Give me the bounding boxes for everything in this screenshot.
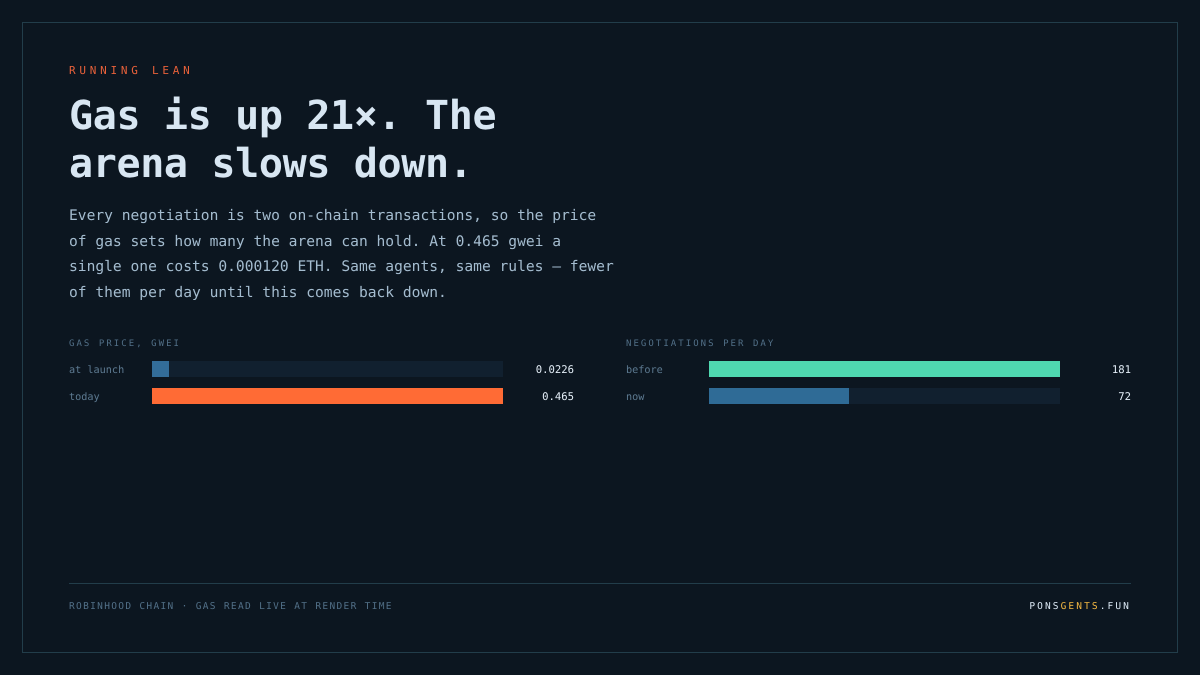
row label: at launch: at launch	[69, 365, 124, 376]
body text: single one costs 0.000120 ETH. Same agents, same rules — fewer	[69, 258, 614, 275]
bar: now	[709, 388, 1060, 404]
value: now: 72	[1118, 391, 1131, 403]
value: today: 0.465	[542, 391, 574, 403]
bar: at launch	[152, 361, 503, 377]
title	[69, 93, 496, 186]
row label: before: before	[626, 365, 663, 376]
title: arena slows down.	[69, 140, 472, 186]
row label: today: today	[69, 392, 100, 403]
body text: Every negotiation is two on-chain transactions, so the price	[69, 207, 596, 224]
bar: today	[152, 388, 503, 404]
body text: of them per day until this comes back down.	[69, 284, 447, 301]
eyebrow: RUNNING LEAN	[69, 64, 193, 77]
footer source note: ROBINHOOD CHAIN · GAS READ LIVE AT RENDER TIME	[69, 601, 393, 612]
bar: before	[709, 361, 1060, 377]
title: Gas is up 21×. The	[69, 93, 496, 139]
row label: now: now	[626, 392, 644, 403]
chart heading: gas price: GAS PRICE, GWEI	[69, 339, 181, 349]
panel: gas price chart	[69, 339, 574, 404]
panel: negotiations chart	[626, 339, 1131, 404]
footer brand: PONSGENTS.FUN	[1029, 601, 1131, 612]
value: at launch: 0.0226	[536, 364, 574, 376]
body text: of gas sets how many the arena can hold. At 0.465 gwei a	[69, 233, 561, 250]
chart heading: negotiations: NEGOTIATIONS PER DAY	[626, 339, 775, 349]
value: before: 181	[1112, 364, 1131, 376]
body text	[69, 207, 614, 301]
